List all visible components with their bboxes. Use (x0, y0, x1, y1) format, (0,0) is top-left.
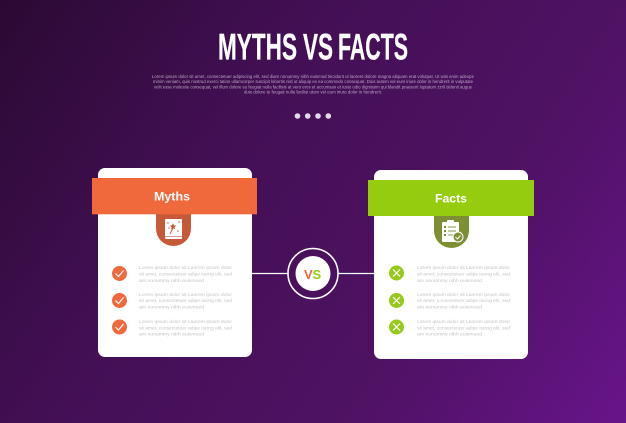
list item 1: am nonummy nibh euismoed (417, 278, 482, 283)
list item 3: sit amet, consectetuer adipe iscing elit, sed (139, 326, 232, 330)
title: FACTS (338, 26, 408, 68)
panel: myths (92, 168, 257, 357)
list item 2: sit amet, consectetuer adipe iscing elit, sed (417, 298, 510, 303)
list item 2: sit amet, consectetuer adipe iscing elit, sed (139, 298, 232, 303)
list item 2: Lorem ipsum dolor sit Laorem ipsum dolor (139, 292, 232, 297)
card: facts (374, 170, 528, 359)
icon tab: myths (156, 212, 191, 246)
VS badge (288, 248, 338, 298)
list item 2: Lorem ipsum dolor sit Laorem ipsum dolor (417, 292, 510, 297)
list item 1: Lorem ipsum dolor sit Laorem ipsum dolor (417, 265, 510, 270)
connector lines (250, 272, 376, 274)
VS badge: S (312, 267, 322, 282)
list item 3: sit amet, consectetuer adipe iscing elit, sed (417, 326, 510, 330)
list item 3 (389, 319, 510, 336)
title (218, 26, 408, 68)
list item 1: am nonummy nibh euismoed (139, 278, 204, 283)
list item 1 (112, 265, 232, 283)
list item 3: Lorem ipsum dolor sit Laorem ipsum dolor (417, 319, 510, 324)
title: MYTHS (218, 26, 297, 68)
list item 2: am nonummy nibh euismoed (139, 304, 204, 310)
list item 2: am nonummy nibh euismoed (417, 304, 482, 310)
VS badge: V (304, 267, 313, 282)
intro text block: duis dolore te feugait nulla facilisi utom vel eum iriure dolor in hendrerit. (244, 90, 382, 94)
title: VS (303, 26, 333, 68)
intro text block: velit esse molestie consequat, vel illum dolore eu feugiat nulla facilisis at vero eros et accumsan et iusto odio dignissim qui blandit praesent luptatum zzril delenit augue (154, 84, 472, 90)
heading: facts: Facts (435, 191, 467, 205)
icon: spell book (165, 219, 182, 239)
list item 2 (389, 292, 510, 310)
pagination dots (295, 113, 331, 119)
list item 3: am nonummy nibh euismoed (417, 332, 482, 336)
list item 3: Lorem ipsum dolor sit Laorem ipsum dolor (139, 319, 232, 324)
intro text block (152, 74, 474, 94)
heading: myths: Myths (154, 189, 190, 203)
list item 3 (112, 319, 232, 336)
card: myths (98, 168, 252, 357)
icon tab: facts (434, 214, 469, 248)
list item 1: sit amet, consectetuer adipe iscing elit, sed (417, 272, 510, 276)
list item 2 (112, 292, 232, 310)
panel: facts (368, 170, 534, 359)
list item 1: sit amet, consectetuer adipe iscing elit, sed (139, 272, 232, 276)
intro text block: Lorem ipsum dolor sit amet, consectetuer adipiscing elit, sed diam nonummy nibh euismod tincidunt ut laoreet dolore magna aliquam erat volutpat. Ut wisi enim adexpe (152, 74, 474, 79)
intro text block: minim veniam, quis nostrud exerci tation ullamcorper suscipit lobortis nisl ut aliquip ex ea commodo consequat. Duis autem vel eum iriure dolor in hendrerit in vulputate (153, 79, 473, 84)
list item 3: am nonummy nibh euismoed (139, 332, 204, 336)
icon: clipboard check (442, 220, 463, 242)
header band: myths (92, 178, 257, 214)
list item 1: Lorem ipsum dolor sit Laorem ipsum dolor (139, 265, 232, 270)
header band: facts (368, 180, 534, 216)
list item 1 (389, 265, 510, 283)
